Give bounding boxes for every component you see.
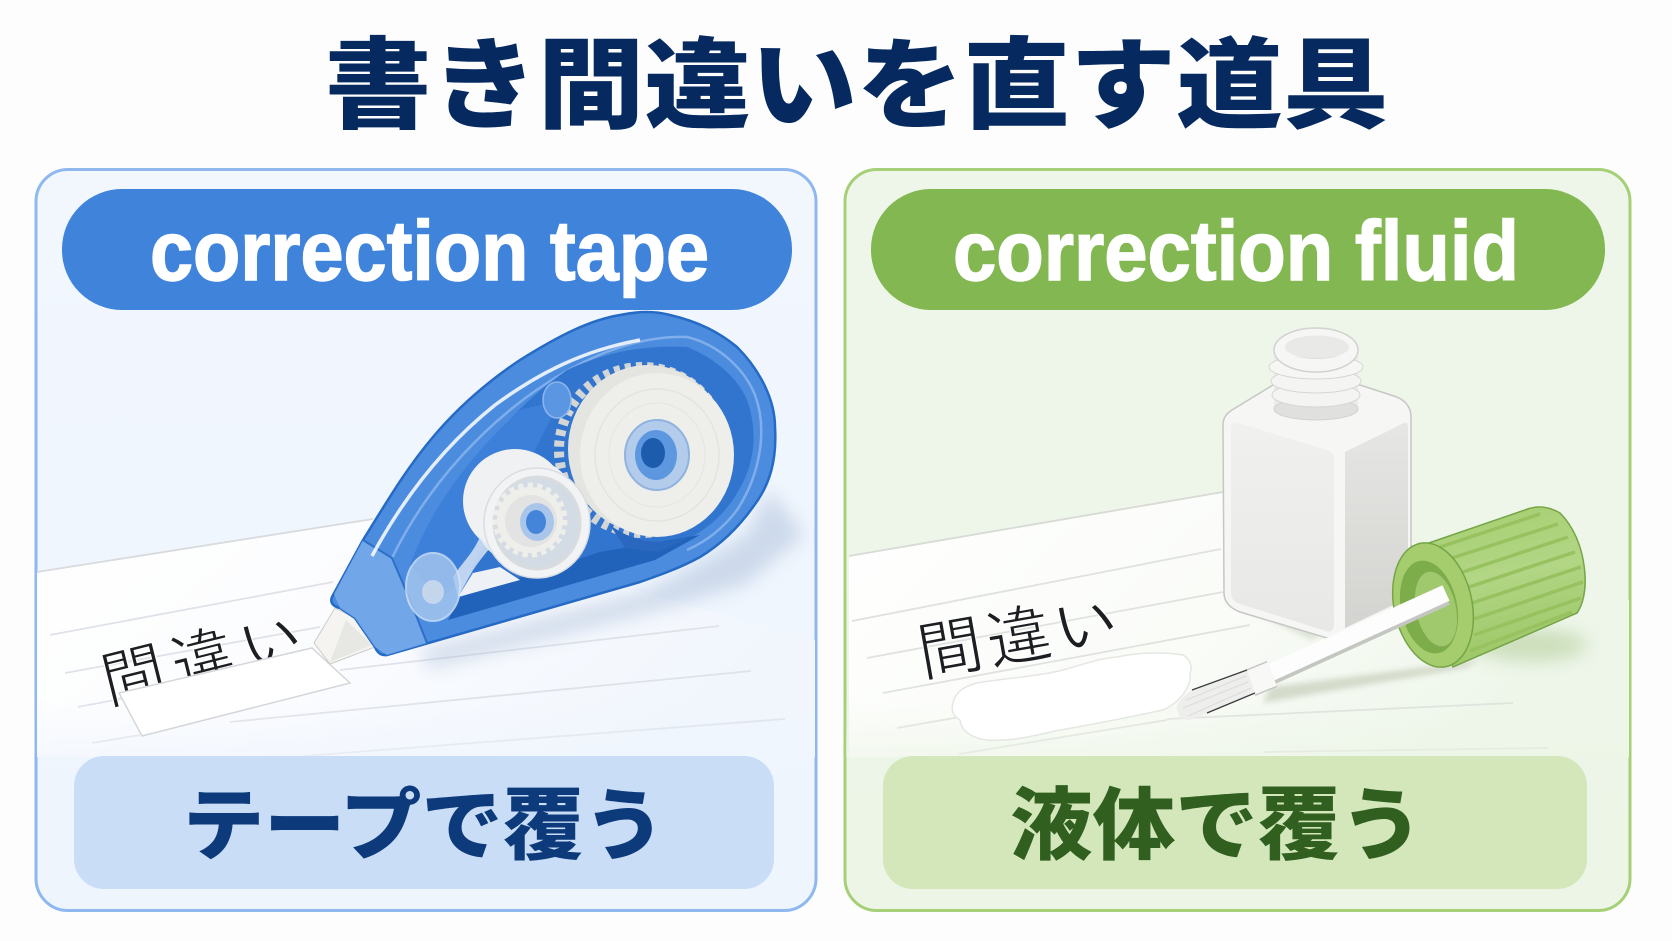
brush stick: [1177, 593, 1446, 720]
bottle front face: [1231, 423, 1334, 632]
heading pill: correction fluid: [871, 189, 1605, 310]
caption box: テープで覆う: テープで覆う: [183, 782, 665, 870]
caption box: 液体で覆う: [883, 756, 1587, 889]
cap shadow: [1472, 629, 1588, 661]
title: 書き間違いを直す道具: [325, 30, 1389, 141]
tape ribbon: [453, 537, 490, 597]
inner ridge: [392, 337, 761, 558]
correction fluid blob: [952, 653, 1191, 740]
handwritten text: 間違い: [912, 584, 1127, 685]
large hub: [625, 420, 689, 490]
bottle neck: [1269, 328, 1363, 420]
correction tape strip: [119, 648, 350, 736]
nib: [314, 608, 375, 664]
bottle side face: [1345, 423, 1408, 628]
icon: correction tape dispenser: [314, 312, 805, 668]
panel background: [36, 170, 816, 910]
roller wheel: [406, 553, 460, 621]
stick shadow: [1263, 660, 1480, 703]
large gear: [559, 367, 725, 533]
bottle shadow: [1224, 598, 1345, 640]
illustration: notebook paper with mistake: [846, 492, 1629, 757]
brush bristles: [1177, 670, 1255, 720]
paper bottom fade: [92, 737, 557, 756]
tape sliver: [458, 567, 520, 597]
shadow: [420, 490, 805, 668]
dark band: [448, 535, 700, 620]
inner window: [453, 347, 754, 595]
dispenser body: [331, 312, 775, 655]
large tape reel: [580, 373, 734, 537]
small gear: [497, 487, 563, 553]
heading pill: correction fluid: correction fluid: [953, 204, 1519, 298]
bottle body: [1223, 385, 1411, 638]
panel: correction fluid: [845, 170, 1630, 910]
highlight: [372, 340, 640, 556]
heading pill: correction tape: correction tape: [150, 204, 709, 298]
caption box: 液体で覆う: 液体で覆う: [1010, 781, 1423, 870]
illustration: notebook paper with mistake: [37, 519, 815, 757]
heading pill: correction tape: [62, 189, 792, 310]
front section: [334, 540, 427, 655]
icon: correction fluid bottle: [1177, 328, 1588, 720]
panel background: [845, 170, 1630, 910]
panel: correction tape: [36, 170, 816, 910]
small tape reel: [463, 449, 567, 553]
paper bottom fade: [846, 708, 1548, 757]
green cap: [1382, 507, 1585, 675]
caption box: テープで覆う: [74, 756, 774, 889]
upper wheel: [543, 382, 571, 418]
ferrule: [1250, 674, 1272, 683]
handwritten text: 間違い: [94, 599, 317, 713]
